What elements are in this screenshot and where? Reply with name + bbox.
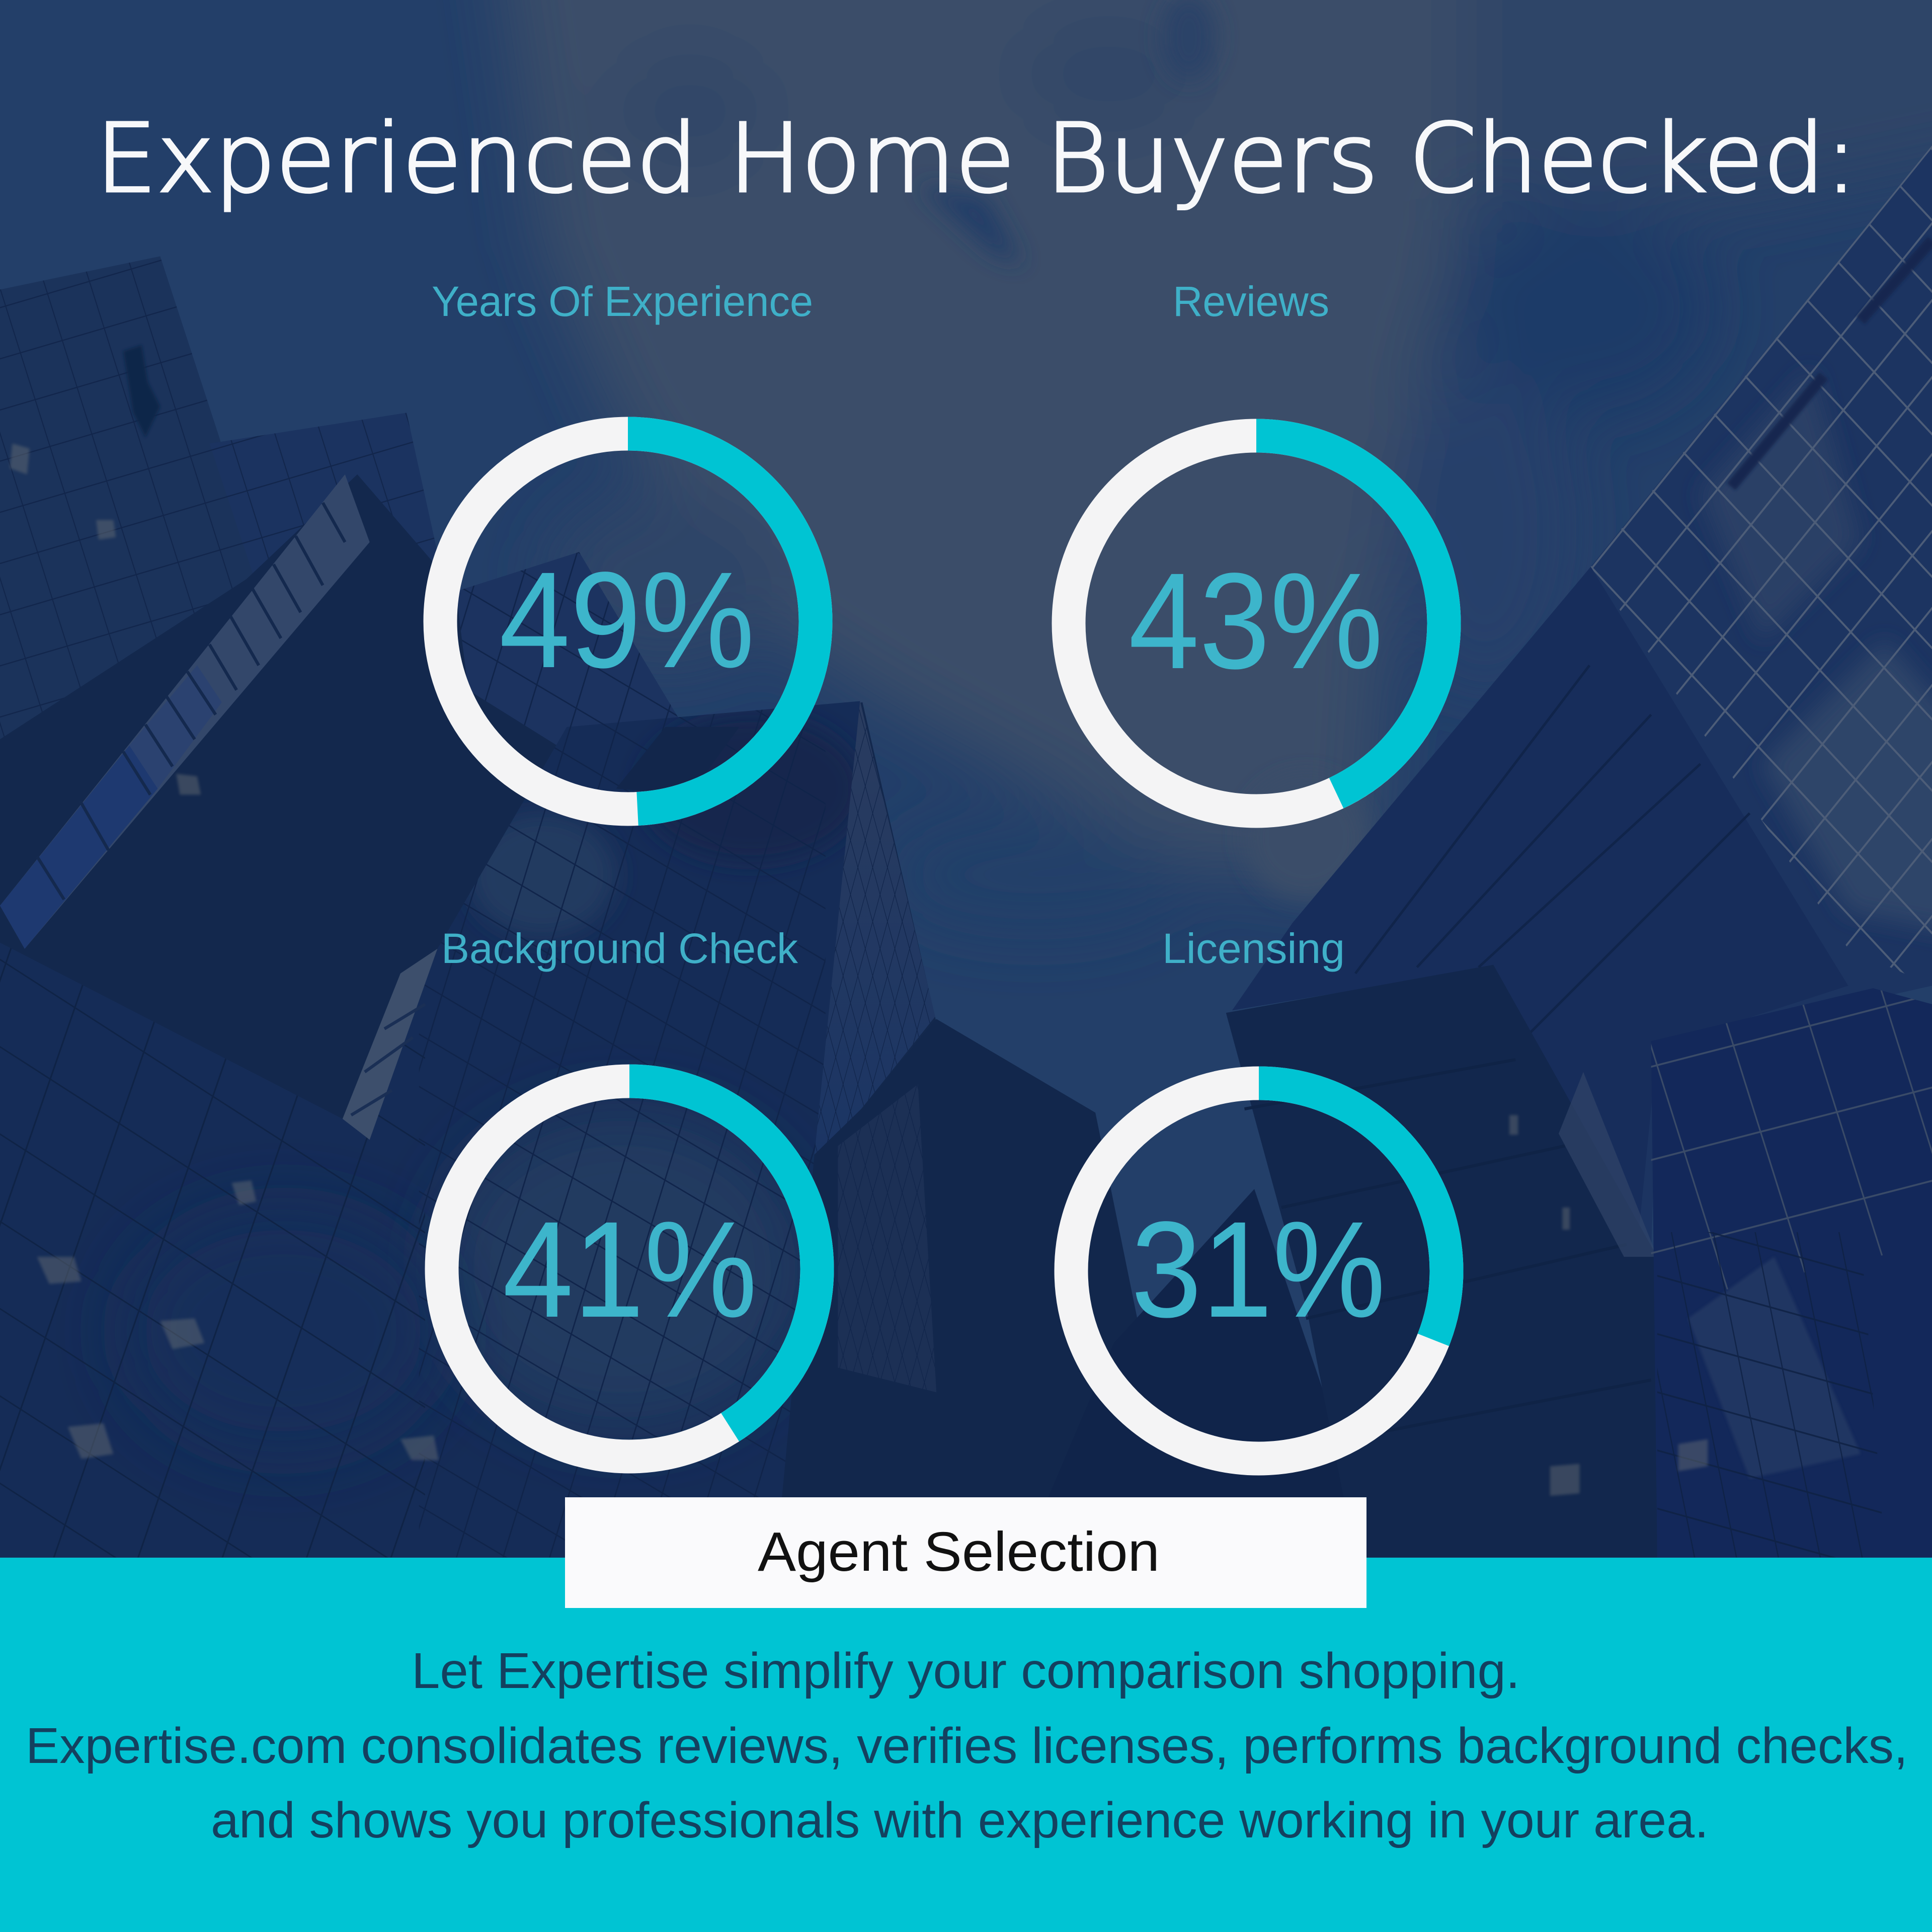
- building: right glass tower: [1232, 145, 1932, 1257]
- building: second tower: [209, 413, 446, 690]
- building: main grid facade: [0, 690, 862, 1565]
- panel: years of experience: [432, 278, 816, 809]
- value: 41%: 41%: [503, 1193, 757, 1346]
- value: 31%: 31%: [1131, 1193, 1386, 1346]
- panel: reviews: [1069, 278, 1444, 811]
- building: pale facade strip: [343, 949, 437, 1140]
- label: licensing: Licensing: [1162, 925, 1345, 972]
- building: reflecting glass strip: [0, 474, 370, 949]
- title: Experienced Home Buyers Checked:: [96, 104, 1858, 214]
- donut chart: 43%: [1069, 436, 1444, 811]
- building: center glass block: [456, 552, 684, 752]
- text block: footer description: Expertise.com consolidates reviews, verifies licenses, performs background checks,: [26, 1718, 1908, 1774]
- donut chart: 31%: [1071, 1083, 1446, 1459]
- building: dark block right of center: [1226, 965, 1657, 1558]
- label: years of experience: Years Of Experience: [432, 278, 813, 325]
- building: dark central mass: [0, 474, 936, 1558]
- building: center lower tower: [776, 1019, 1380, 1558]
- callout: agent selection: [565, 1497, 1366, 1608]
- label: background check: Background Check: [441, 925, 798, 972]
- value: 43%: 43%: [1129, 544, 1383, 697]
- panel: background check: [441, 925, 817, 1457]
- text block: footer description: [26, 1643, 1908, 1848]
- lit windows: [10, 444, 1708, 1496]
- building: fine lattice face: [815, 701, 935, 1155]
- panel: teal footer band: [0, 1558, 1932, 1932]
- label: reviews: Reviews: [1173, 278, 1329, 325]
- building: upper-left tower: [0, 256, 265, 788]
- callout: agent selection: Agent Selection: [758, 1521, 1160, 1583]
- text block: footer description: Let Expertise simplify your comparison shopping.: [412, 1643, 1520, 1699]
- text block: footer description: and shows you professionals with experience working in your area.: [211, 1792, 1709, 1848]
- donut chart: 41%: [442, 1081, 817, 1457]
- building: lower right: [1651, 988, 1932, 1558]
- value: 49%: 49%: [499, 543, 755, 696]
- panel: licensing: [1071, 925, 1446, 1459]
- donut chart: 49%: [440, 434, 816, 809]
